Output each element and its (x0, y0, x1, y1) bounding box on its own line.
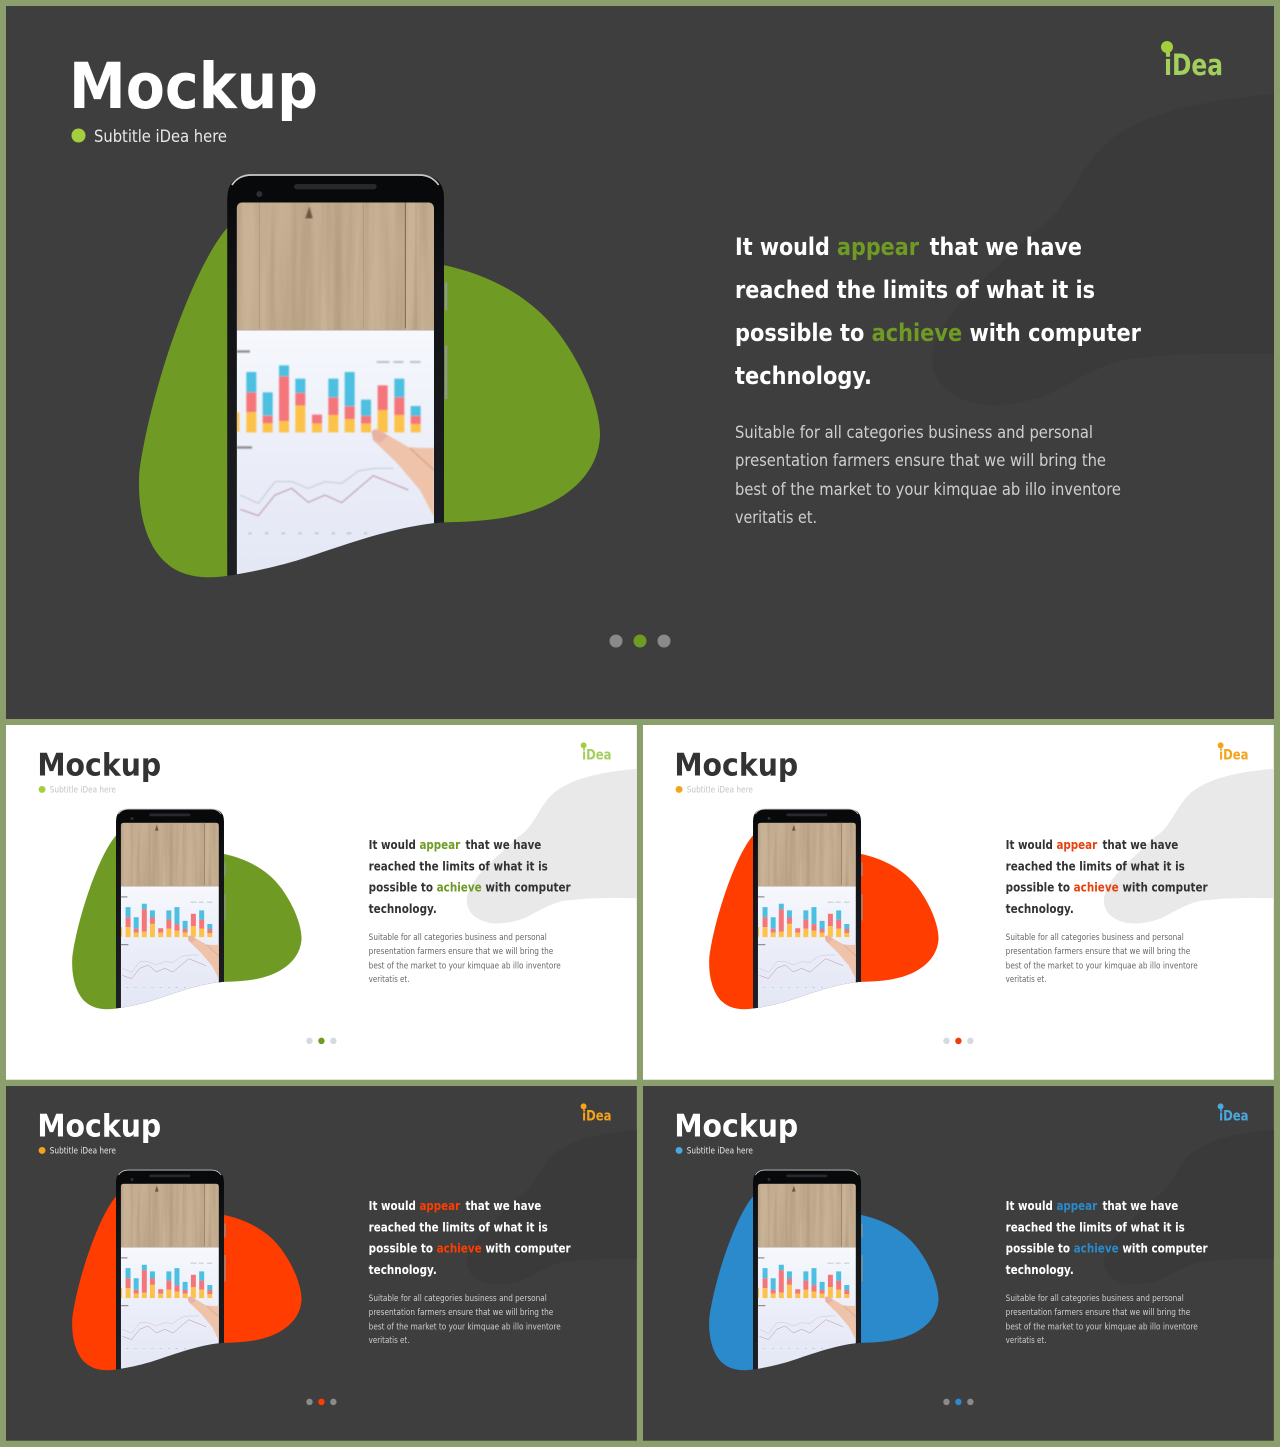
title: Mockup (674, 1109, 798, 1145)
background shape (1104, 1130, 1274, 1284)
title: Mockup (37, 748, 161, 784)
title: Mockup (37, 1109, 161, 1145)
slide background (643, 1086, 1274, 1441)
headline: It would appear that we have (369, 1199, 541, 1213)
subtitle: Subtitle iDea here (687, 1146, 753, 1156)
body text (369, 932, 561, 984)
body text (369, 1293, 561, 1345)
body text: veritatis et. (369, 1335, 409, 1345)
subtitle: Subtitle iDea here (687, 785, 753, 795)
subtitle bullet (72, 128, 86, 142)
phone mockup with chart (753, 1170, 863, 1373)
headline: It would appear that we have (735, 233, 1082, 261)
body text: Suitable for all categories business and personal (1006, 932, 1184, 942)
logo (1218, 742, 1248, 763)
body text: Suitable for all categories business and personal (369, 932, 547, 942)
headline: technology. (1006, 902, 1074, 916)
phone mockup with chart (116, 809, 226, 1012)
panel: dark slide blue (643, 1086, 1274, 1441)
body text: presentation farmers ensure that we will bring the (1006, 946, 1190, 956)
slide background (643, 725, 1274, 1080)
body text: best of the market to your kimquae ab illo inventore (369, 960, 561, 970)
background shape (932, 94, 1274, 405)
colour blob (72, 835, 302, 1009)
background shape (467, 769, 637, 923)
logo (581, 1103, 611, 1124)
body text: veritatis et. (735, 508, 817, 528)
headline: technology. (369, 1263, 437, 1277)
body text: veritatis et. (1006, 974, 1046, 984)
colour blob (709, 835, 939, 1009)
slide background (6, 6, 1274, 719)
headline: possible to achieve with computer (1006, 881, 1208, 895)
headline: possible to achieve with computer (369, 1242, 571, 1256)
subtitle bullet (39, 1147, 46, 1154)
body text: best of the market to your kimquae ab illo inventore (369, 1321, 561, 1331)
headline (1006, 1199, 1208, 1277)
headline: reached the limits of what it is (735, 276, 1095, 304)
subtitle bullet (676, 786, 683, 793)
background shape (1104, 769, 1274, 923)
logo: iDea (1219, 747, 1248, 763)
title: Mockup (69, 50, 318, 123)
body text (1006, 932, 1198, 984)
body text: veritatis et. (369, 974, 409, 984)
subtitle bullet (676, 1147, 683, 1154)
slide background (6, 725, 637, 1080)
pagination dots (610, 634, 670, 648)
colour blob (72, 1196, 302, 1370)
subtitle bullet (39, 786, 46, 793)
subtitle: Subtitle iDea here (94, 127, 227, 147)
body text: Suitable for all categories business and personal (1006, 1293, 1184, 1303)
pagination dots (306, 1038, 337, 1044)
headline: reached the limits of what it is (369, 1220, 548, 1234)
panel: dark slide red (6, 1086, 637, 1441)
headline (369, 838, 571, 916)
headline: technology. (369, 902, 437, 916)
body text: presentation farmers ensure that we will bring the (1006, 1307, 1190, 1317)
body text: presentation farmers ensure that we will bring the (369, 946, 553, 956)
pagination dots (943, 1038, 974, 1044)
phone mockup with chart (753, 809, 863, 1012)
slide background (6, 1086, 637, 1441)
phone mockup with chart (116, 1170, 226, 1373)
headline: technology. (1006, 1263, 1074, 1277)
headline (1006, 838, 1208, 916)
logo: iDea (1219, 1108, 1248, 1124)
panel: large dark slide (6, 6, 1274, 719)
phone mockup with chart (227, 175, 447, 584)
logo (1218, 1103, 1248, 1124)
body text: presentation farmers ensure that we will bring the (735, 451, 1106, 471)
body text: veritatis et. (1006, 1335, 1046, 1345)
colour blob (139, 227, 600, 577)
headline: possible to achieve with computer (735, 319, 1141, 347)
headline: It would appear that we have (1006, 1199, 1178, 1213)
body text (735, 423, 1121, 528)
body text: presentation farmers ensure that we will bring the (369, 1307, 553, 1317)
headline (735, 233, 1141, 390)
body text: Suitable for all categories business and personal (735, 423, 1093, 443)
headline: reached the limits of what it is (1006, 859, 1185, 873)
logo (581, 742, 611, 763)
body text: best of the market to your kimquae ab illo inventore (1006, 960, 1198, 970)
panel: white slide red (643, 725, 1274, 1080)
logo: iDea (582, 1108, 611, 1124)
body text: best of the market to your kimquae ab illo inventore (735, 480, 1121, 500)
headline: It would appear that we have (369, 838, 541, 852)
panel: white slide green (6, 725, 637, 1080)
background shape (467, 1130, 637, 1284)
headline: reached the limits of what it is (369, 859, 548, 873)
headline: possible to achieve with computer (369, 881, 571, 895)
headline (369, 1199, 571, 1277)
body text: best of the market to your kimquae ab illo inventore (1006, 1321, 1198, 1331)
logo (1161, 41, 1223, 82)
logo: iDea (1164, 48, 1223, 82)
headline: possible to achieve with computer (1006, 1242, 1208, 1256)
logo: iDea (582, 747, 611, 763)
pagination dots (306, 1399, 337, 1405)
subtitle: Subtitle iDea here (50, 785, 116, 795)
body text (1006, 1293, 1198, 1345)
colour blob (709, 1196, 939, 1370)
headline: technology. (735, 362, 872, 390)
title: Mockup (674, 748, 798, 784)
headline: It would appear that we have (1006, 838, 1178, 852)
headline: reached the limits of what it is (1006, 1220, 1185, 1234)
pagination dots (943, 1399, 974, 1405)
body text: Suitable for all categories business and personal (369, 1293, 547, 1303)
subtitle: Subtitle iDea here (50, 1146, 116, 1156)
